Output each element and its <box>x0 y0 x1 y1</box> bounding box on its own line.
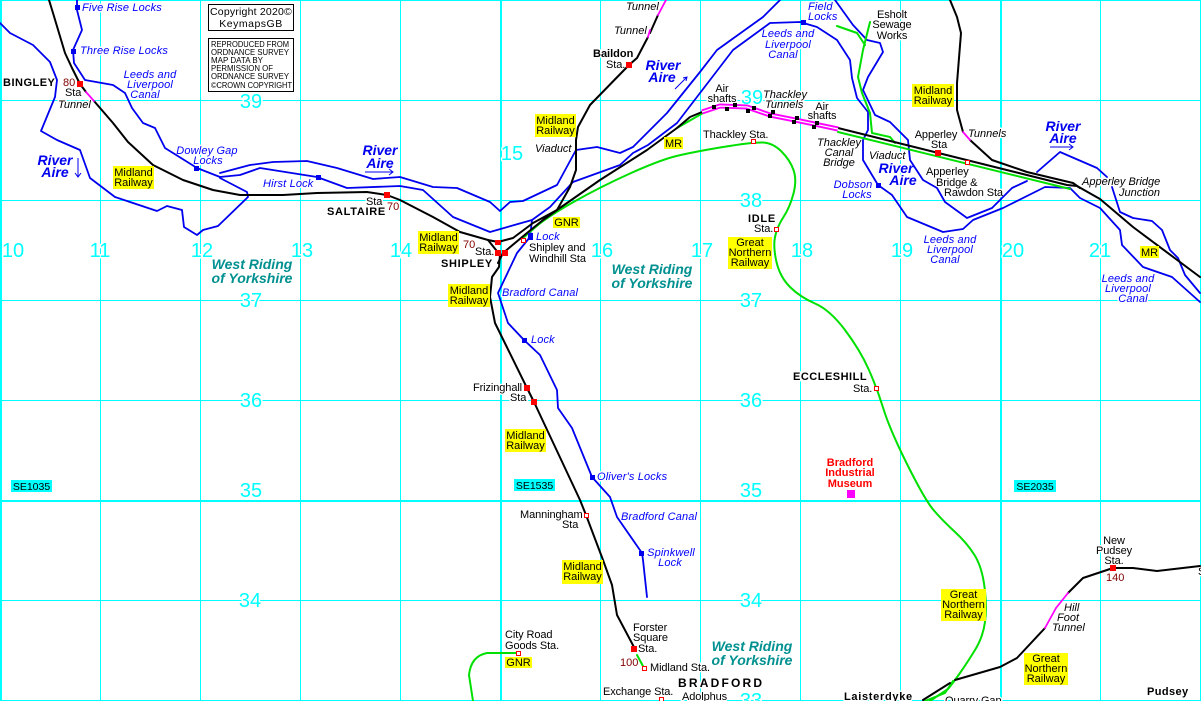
River Aire labels: River <box>37 152 74 168</box>
grid northings labels: 35 <box>740 480 762 502</box>
station and place labels: Sta <box>510 392 527 404</box>
museum label: Museum <box>828 478 873 490</box>
station and place labels: Frizinghall <box>473 382 522 394</box>
county labels: West Riding of Yorkshire: of Yorkshire <box>212 270 293 286</box>
ordnance survey notice: ORDNANCE SURVEY <box>211 72 290 81</box>
River Aire labels: Aire <box>1048 130 1077 146</box>
station and place labels: SALTAIRE <box>327 206 386 218</box>
railway name tags <box>113 84 1159 685</box>
railway name tags: GNR <box>506 657 531 669</box>
structure labels: tunnels and viaducts: Tunnel <box>614 25 647 37</box>
county labels: West Riding of Yorkshire: West Riding <box>712 638 793 654</box>
structure labels: tunnels and viaducts: Junction <box>1118 187 1160 199</box>
county labels: West Riding of Yorkshire: West Riding <box>612 261 693 277</box>
station and place labels: Pudsey <box>1147 686 1189 698</box>
railway name tags: Railway <box>731 257 770 269</box>
structure labels: tunnels and viaducts: Tunnel <box>58 99 91 111</box>
station and place labels: shafts <box>808 110 837 122</box>
station and place labels: Sta. <box>606 59 625 71</box>
station and place labels: BRADFORD <box>678 676 764 690</box>
canal and lock labels: Leeds and <box>1102 273 1155 285</box>
air shafts <box>712 103 819 129</box>
station and place labels: Sewage <box>872 19 912 31</box>
canal and lock labels: Locks <box>193 155 223 167</box>
station and place labels: 140 <box>1106 572 1124 584</box>
station and place labels: BINGLEY <box>3 77 56 89</box>
ordnance survey notice: MAP DATA BY <box>211 56 264 65</box>
county labels: West Riding of Yorkshire: of Yorkshire <box>612 275 693 291</box>
map grid reference tags <box>11 479 1056 493</box>
canal and lock labels: Dobson <box>834 179 872 191</box>
grid eastings labels: 14 <box>390 240 412 262</box>
grid northings labels: 39 <box>741 87 763 109</box>
grid northings labels: 34 <box>239 590 261 612</box>
station and place labels: IDLE <box>748 213 776 225</box>
map grid reference tags: SE1035 <box>13 481 50 493</box>
canal and lock labels: Five Rise Locks <box>82 2 162 14</box>
ordnance survey notice: REPRODUCED FROM <box>211 40 289 49</box>
ordnance survey notice <box>208 38 294 92</box>
structure labels: tunnels and viaducts: Thackley <box>763 89 809 101</box>
grid northings labels: 34 <box>740 590 762 612</box>
railway name tags: Midland <box>419 232 458 244</box>
structure labels: tunnels and viaducts: Tunnel <box>1052 622 1085 634</box>
station and place labels: 80 <box>63 77 75 89</box>
grid eastings labels: 12 <box>191 240 213 262</box>
station and place labels: Square <box>633 632 668 644</box>
canal and lock labels: Bradford Canal <box>502 287 578 299</box>
grid eastings labels: 17 <box>691 240 713 262</box>
River Aire labels: River <box>645 57 682 73</box>
grid eastings labels <box>2 143 1111 262</box>
River Aire labels: River <box>1045 118 1082 134</box>
canal and lock labels: Hirst Lock <box>263 178 314 190</box>
grid eastings labels: 20 <box>1002 240 1024 262</box>
tunnels in magenta <box>86 0 1068 628</box>
railway name tags: Northern <box>1025 663 1067 675</box>
grid northings labels: 36 <box>740 390 762 412</box>
railway name tags: Midland <box>914 85 952 97</box>
station and place labels: Works <box>877 30 908 42</box>
structure labels: tunnels and viaducts: Viaduct <box>869 150 906 162</box>
River Aire labels: Aire <box>647 69 676 85</box>
station and place labels: Sta <box>931 139 948 151</box>
railway name tags: Railway <box>114 177 153 189</box>
station and place labels: shafts <box>708 93 737 105</box>
grid eastings labels: 18 <box>791 240 813 262</box>
ordnance survey notice: PERMISSION OF <box>211 64 273 73</box>
station and place labels: 100 <box>620 657 638 669</box>
station and place labels: Baildon <box>593 48 634 60</box>
station and place labels: Forster <box>633 622 668 634</box>
station and place labels: Air <box>815 101 829 113</box>
canal and lock labels: Leeds and <box>762 28 815 40</box>
grid eastings labels: 11 <box>90 240 110 262</box>
structure labels: tunnels and viaducts: Foot <box>1057 612 1080 624</box>
structure labels: tunnels and viaducts: Viaduct <box>535 143 572 155</box>
River Aire labels: Aire <box>888 172 917 188</box>
railway name tags: Great <box>950 589 977 601</box>
grid eastings labels: 19 <box>891 240 913 262</box>
locks <box>71 5 881 556</box>
canal and lock labels: Lock <box>536 231 560 243</box>
grid eastings labels: 15 <box>501 143 523 165</box>
railway name tags: Railway <box>450 295 489 307</box>
grid eastings labels: 10 <box>2 240 24 262</box>
grid northings labels: 37 <box>740 290 762 312</box>
railway name tags: MR <box>1141 247 1158 259</box>
railway name tags: GNR <box>554 217 579 229</box>
grid eastings labels: 21 <box>1089 240 1111 262</box>
canal and lock labels: Dowley Gap <box>176 145 238 157</box>
grid northings labels: 37 <box>240 290 262 312</box>
canal and lock labels: Leeds and <box>124 69 177 81</box>
canal and lock labels: Leeds and <box>924 234 977 246</box>
railway stations <box>77 62 1116 701</box>
museum label <box>825 457 875 498</box>
grid northings labels: 39 <box>240 91 262 113</box>
railway name tags: Great <box>1032 653 1060 665</box>
museum label: Bradford <box>827 457 873 469</box>
structure labels: tunnels and viaducts: Tunnels <box>968 128 1007 140</box>
station and place labels: Bridge & <box>936 177 978 189</box>
station and place labels: 70 <box>387 201 399 213</box>
station and place labels: Sta <box>562 519 579 531</box>
canal and lock labels: Bradford Canal <box>621 511 697 523</box>
copyright box <box>208 4 294 30</box>
station and place labels: Midland Sta. <box>650 662 710 674</box>
canal and lock labels: Oliver's Locks <box>597 471 668 483</box>
station and place labels: Sta. <box>853 383 872 395</box>
railway name tags: Northern <box>942 599 985 611</box>
station and place labels: Exchange Sta. <box>603 686 673 698</box>
grid northings labels: 35 <box>240 480 262 502</box>
station and place labels: New <box>1103 535 1125 547</box>
station and place labels: Sta <box>65 87 82 99</box>
canal and lock labels: Canal <box>768 49 798 61</box>
grid eastings labels: 16 <box>591 240 613 262</box>
canal and lock labels: Liverpool <box>1105 283 1151 295</box>
canal and lock labels <box>80 1 1155 569</box>
railway name tags: Railway <box>563 571 602 583</box>
structure labels: tunnels and viaducts: Canal <box>825 147 854 159</box>
station and place labels: Sta. <box>475 246 494 258</box>
structure labels: tunnels and viaducts: Thackley <box>817 137 863 149</box>
station and place labels: City Road <box>505 629 552 641</box>
station and place labels: Windhill Sta <box>529 253 587 265</box>
copyright box: Copyright 2020© <box>210 6 292 18</box>
railway name tags: Railway <box>944 609 983 621</box>
station and place labels: Esholt <box>877 9 907 21</box>
railway name tags: Northern <box>729 247 771 259</box>
railway name tags: Railway <box>536 125 575 137</box>
structure labels: tunnels and viaducts: Hill <box>1064 602 1080 614</box>
county labels: West Riding of Yorkshire: of Yorkshire <box>712 652 793 668</box>
station and place labels: Apperley <box>926 166 969 178</box>
railway name tags: MR <box>665 138 682 150</box>
station and place labels: Sta <box>366 196 383 208</box>
station and place labels: SHIPLEY <box>441 258 493 270</box>
station and place labels: Shipley and <box>529 242 585 254</box>
River Aire labels: Aire <box>40 164 69 180</box>
station and place labels: Thackley Sta. <box>703 129 768 141</box>
canal and lock labels: Three Rise Locks <box>80 45 168 57</box>
River Aire labels: River <box>878 160 915 176</box>
structure labels: tunnels and viaducts: Bridge <box>823 157 855 169</box>
station and place labels: ECCLESHILL <box>793 371 867 383</box>
station and place labels: Pudsey <box>1096 545 1133 557</box>
canal and lock labels: Locks <box>808 11 838 23</box>
station and place labels: Goods Sta. <box>505 640 559 652</box>
county labels: West Riding of Yorkshire: West Riding <box>212 256 293 272</box>
canal and lock labels: Lock <box>658 557 682 569</box>
canal and lock labels: Liverpool <box>127 79 173 91</box>
canal and lock labels: Canal <box>130 89 160 101</box>
station and place labels: Sta. <box>638 643 657 655</box>
railway name tags: Great <box>736 237 764 249</box>
railway name tags: Railway <box>914 95 953 107</box>
station and place labels: Sta. <box>1104 555 1124 567</box>
railway name tags: Railway <box>506 440 545 452</box>
ordnance survey notice: ORDNANCE SURVEY <box>211 48 290 57</box>
railway name tags: Railway <box>1027 673 1066 685</box>
station and place labels: Apperley <box>915 129 958 141</box>
canal and lock labels: Lock <box>531 334 555 346</box>
map grid reference tags: SE1535 <box>516 480 553 492</box>
River Aire labels: River <box>362 142 399 158</box>
railway name tags: Midland <box>563 561 602 573</box>
map grid reference tags: SE2035 <box>1016 481 1054 493</box>
structure labels: tunnels and viaducts: Tunnels <box>765 99 804 111</box>
railway name tags: Midland <box>450 285 488 297</box>
River Aire labels <box>37 57 1082 188</box>
station and place labels: Air <box>715 83 729 95</box>
River Aire labels: Aire <box>365 155 394 171</box>
river flow arrows <box>75 77 1073 177</box>
structure labels: tunnels and viaducts: Tunnel <box>626 1 659 13</box>
museum label: Industrial <box>825 467 875 479</box>
railway name tags: Midland <box>114 167 153 179</box>
canal and lock labels: Liverpool <box>765 39 811 51</box>
Great Northern Railway lines <box>469 22 1070 701</box>
canal and lock labels: Canal <box>930 254 960 266</box>
railway name tags: Midland <box>506 430 545 442</box>
canal and lock labels: Locks <box>842 189 872 201</box>
canal and lock labels: Spinkwell <box>647 547 695 559</box>
grid northings labels: 38 <box>740 190 762 212</box>
station and place labels: Manningham <box>520 509 583 521</box>
canal and lock labels: Canal <box>1118 293 1148 305</box>
canal and lock labels: Liverpool <box>927 244 973 256</box>
copyright box: KeymapsGB <box>219 18 283 30</box>
railway name tags: Railway <box>419 242 458 254</box>
structure labels: tunnels and viaducts: Apperley Bridge <box>1081 176 1160 188</box>
canal and lock labels: Field <box>808 1 833 13</box>
grid northings labels: 36 <box>240 390 262 412</box>
railway name tags: Midland <box>536 115 575 127</box>
ordnance survey notice: ©CROWN COPYRIGHT <box>211 81 292 90</box>
county labels: West Riding of Yorkshire <box>212 256 793 668</box>
station and place labels: Sta. <box>754 223 773 235</box>
grid eastings labels: 13 <box>291 240 313 262</box>
station and place labels: Rawdon Sta <box>944 187 1004 199</box>
grid northings labels <box>239 87 763 701</box>
station and place labels: 70 <box>463 239 475 251</box>
